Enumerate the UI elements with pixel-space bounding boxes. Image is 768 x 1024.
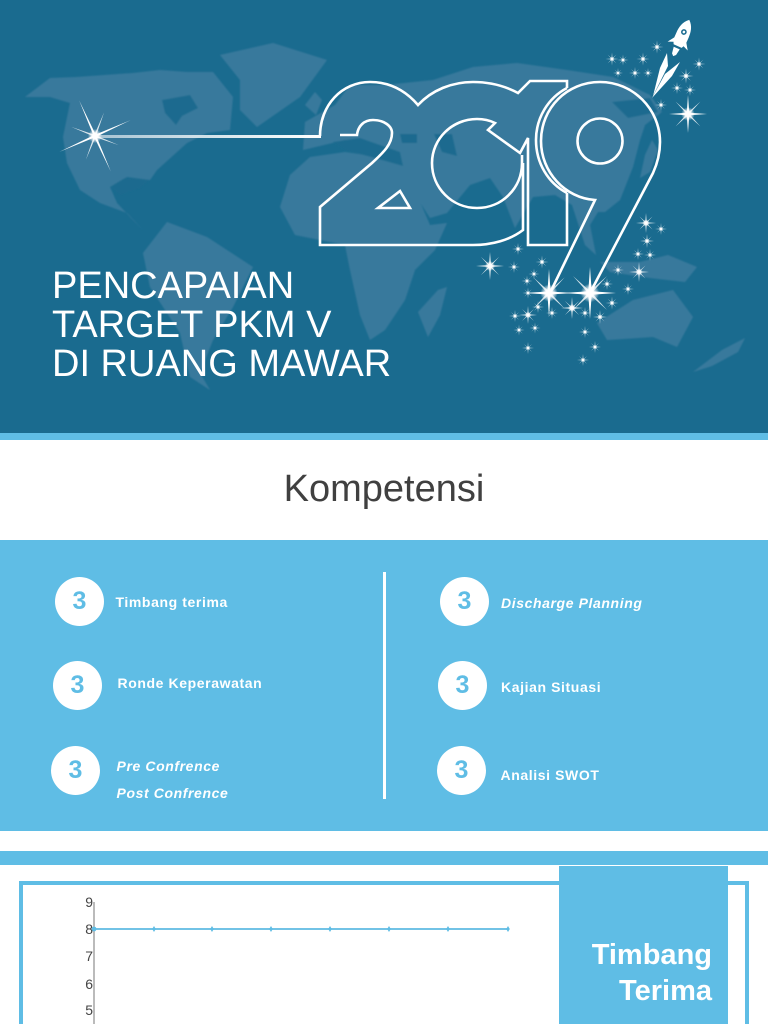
label text: Terima [619,975,712,1007]
item: Pre Confrence [51,746,100,795]
2019 outline [320,81,660,293]
chart frame [19,881,749,1024]
title: PENCAPAIAN [52,265,294,307]
panel: competencies [0,540,768,831]
world map [25,43,745,390]
line chart [92,902,510,1024]
panel: competencies: Analisi SWOT [500,767,600,783]
item: Timbang terima: 3 [73,587,86,615]
rocket exhaust streaks [652,53,680,98]
axis labels: 7 [85,948,93,964]
digit 9 offset line [536,88,567,193]
title: DI RUANG MAWAR [52,343,391,385]
item: Kajian Situasi [438,661,487,710]
divider [383,572,386,799]
axis labels: 9 [85,894,93,910]
item: Ronde Keperawatan: 3 [71,671,84,699]
band [0,851,768,865]
beam line [95,135,321,138]
land masses [25,43,745,390]
triangle counter [378,191,410,208]
panel: competencies: Ronde Keperawatan [118,675,262,691]
big star on beam [44,85,146,187]
digit 9 [541,82,660,293]
title [52,265,391,385]
item: Ronde Keperawatan [53,661,102,710]
axis labels: 5 [85,1002,93,1018]
label text: Timbang [592,939,712,971]
axis labels [85,894,93,1018]
header background [0,0,768,433]
item: Analisi SWOT: 3 [455,756,468,784]
panel: competencies: Timbang terima [116,594,228,610]
panel: competencies: Pre Confrence [116,758,220,774]
label box [559,866,728,1024]
item: Timbang terima [55,577,104,626]
water cutouts [110,95,658,195]
axis labels: 6 [85,976,93,992]
item: Kajian Situasi: 3 [456,671,469,699]
icon: rocket [663,15,699,61]
sparkles lower [476,213,667,366]
sparkles upper right [606,40,707,133]
item: Pre Confrence: 3 [69,756,82,784]
section heading: Kompetensi [284,468,484,510]
item: Analisi SWOT [437,746,486,795]
axis labels: 8 [85,921,93,937]
item: Discharge Planning: 3 [458,587,471,615]
item: Discharge Planning [440,577,489,626]
label text [592,939,712,1007]
item: Post Confrence: Post Confrence [116,785,228,801]
header banner [0,0,768,440]
digit 9 counter [578,118,622,164]
accent band [0,433,768,440]
title: TARGET PKM V [52,304,331,346]
panel: competencies: Discharge Planning [501,595,642,611]
panel: competencies: Kajian Situasi [501,679,601,695]
digits 2 and 0 [320,81,567,245]
